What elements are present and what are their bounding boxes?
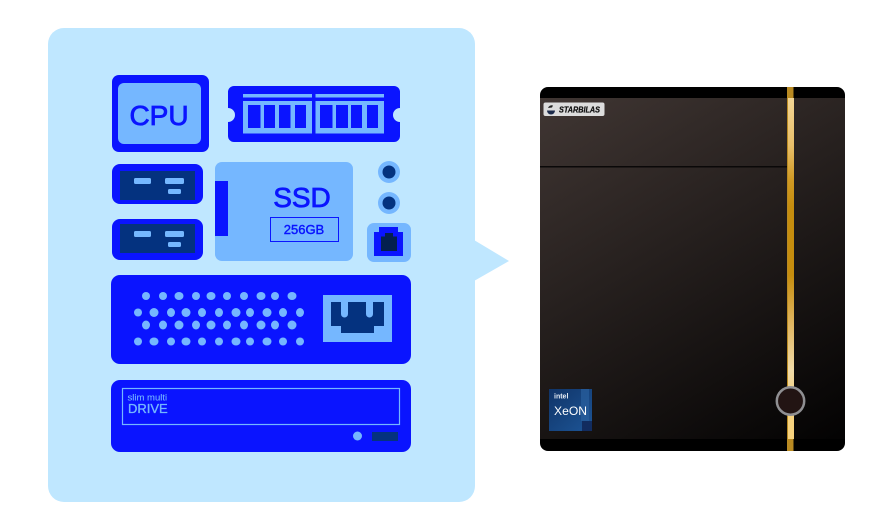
- SSD drive: SSD: [273, 182, 331, 213]
- USB port top: [112, 164, 203, 204]
- intel xeon badge: XeON: [554, 404, 587, 418]
- SSD drive: 256GB: [284, 222, 324, 237]
- front panel body: [540, 98, 845, 439]
- optical port: [367, 223, 411, 262]
- workstation tower front: [540, 87, 845, 451]
- CPU chip: [112, 75, 209, 152]
- intel xeon badge: [549, 389, 592, 431]
- slim multi drive: [111, 380, 411, 452]
- slim multi drive: DRIVE: [128, 401, 168, 416]
- SSD drive: [215, 162, 353, 261]
- audio jack bottom: [378, 192, 400, 214]
- audio jack top: [378, 161, 400, 183]
- CPU chip: CPU: [129, 100, 189, 131]
- panel: components callout: [48, 28, 509, 502]
- RAM module: [228, 86, 400, 142]
- intel xeon badge: intel: [554, 394, 568, 400]
- ethernet port: [323, 295, 392, 342]
- vent dots: [134, 292, 304, 346]
- rear I/O panel: [111, 275, 411, 364]
- gold light strip: [787, 87, 794, 451]
- USB port bottom: [112, 219, 203, 260]
- slim multi drive: slim multi: [128, 392, 167, 404]
- brand label: STARBILAS: [559, 105, 600, 115]
- power button: [777, 387, 804, 415]
- brand label: [544, 102, 604, 116]
